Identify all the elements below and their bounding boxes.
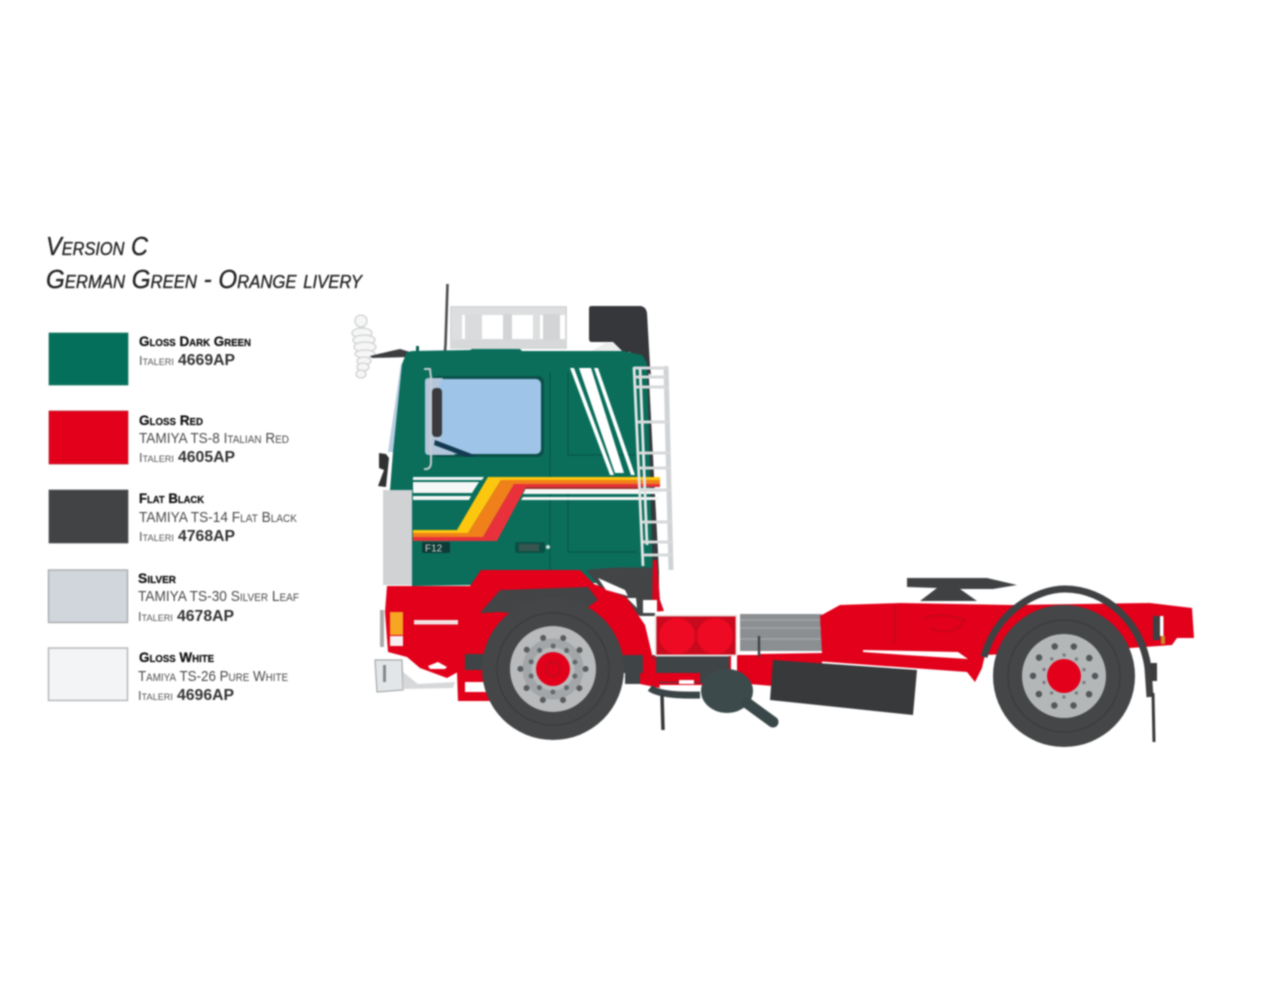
michelin man mascot <box>352 315 376 378</box>
legend item: flat black: Italeri <box>139 530 174 544</box>
F12 badge: F12 <box>425 544 443 554</box>
rear chassis rail <box>760 603 1194 682</box>
cab roof stubs <box>416 346 419 354</box>
window frame <box>425 378 455 455</box>
red chassis mid <box>737 655 822 686</box>
front wheel <box>482 598 624 740</box>
colour legend <box>48 333 299 704</box>
exhaust outlet <box>375 660 455 692</box>
side window <box>431 376 544 457</box>
ladder rungs <box>634 368 673 555</box>
antenna <box>445 284 448 351</box>
windscreen edge <box>388 364 405 452</box>
green cab body <box>390 349 653 586</box>
legend item: gloss white: Italeri <box>138 689 173 703</box>
legend item: gloss dark green: Italeri <box>139 354 174 368</box>
legend item: gloss white: Tamiya TS-26 Pure White <box>138 668 288 685</box>
legend item: gloss white <box>48 648 288 704</box>
title: German Green - Orange livery <box>46 264 364 294</box>
F12 badge <box>422 542 450 554</box>
dark axle mount front <box>465 654 487 670</box>
door handle <box>515 542 550 553</box>
legend item: silver <box>48 570 299 625</box>
roof rack <box>451 307 566 348</box>
rear wheel <box>993 605 1135 747</box>
exhaust stack <box>589 306 651 375</box>
red cab lower and fender <box>385 570 660 688</box>
legend item: gloss dark green: Gloss Dark Green <box>139 333 251 349</box>
truck illustration <box>352 284 1194 747</box>
mirror <box>432 388 442 437</box>
fifth wheel <box>907 578 1017 601</box>
legend item: silver: 4678AP <box>177 608 234 625</box>
legend item: silver: Italeri <box>138 610 173 624</box>
legend item: flat black: 4768AP <box>178 528 235 545</box>
dark rear cab mount <box>586 567 655 616</box>
silver battery box <box>740 614 822 657</box>
ladder outer rail <box>666 366 671 570</box>
legend item: gloss dark green <box>49 333 251 385</box>
title: Version C <box>46 231 148 261</box>
rear fender <box>984 589 1150 697</box>
front lamp <box>380 610 403 647</box>
cab panel lines <box>550 372 637 570</box>
mud flap <box>770 660 917 715</box>
legend item: silver: TAMIYA TS-30 Silver Leaf <box>138 588 299 605</box>
rear mudflap stay <box>1150 663 1157 742</box>
legend item: gloss red: 4605AP <box>178 449 235 466</box>
bumper highlight <box>414 620 458 624</box>
ladder <box>634 366 673 570</box>
white cut-outs <box>428 578 657 669</box>
legend item: flat black <box>49 490 298 545</box>
front stay <box>662 695 663 730</box>
white horizontal stripes <box>413 477 660 500</box>
red frame around tool box <box>655 656 730 684</box>
legend item: silver: Silver <box>138 570 177 586</box>
fuel tank box <box>656 616 736 656</box>
legend item: gloss dark green: 4669AP <box>178 352 235 369</box>
spare drum <box>701 669 753 713</box>
rear lights <box>1153 616 1165 644</box>
dark cab rear strip <box>640 352 659 590</box>
tow lever <box>747 703 773 722</box>
front step bracket <box>457 672 490 701</box>
title <box>46 231 364 294</box>
legend item: gloss red: TAMIYA TS-8 Italian Red <box>139 430 289 447</box>
legend item: gloss white: 4696AP <box>177 687 234 704</box>
legend item: flat black: Flat Black <box>139 490 205 506</box>
legend item: gloss red: Italeri <box>139 451 174 465</box>
chassis shading <box>895 605 965 643</box>
legend item: gloss red: Gloss Red <box>139 412 203 428</box>
white diagonal stripes <box>570 368 635 475</box>
silver front panel <box>383 490 412 585</box>
wiper <box>434 440 477 457</box>
legend item: flat black: TAMIYA TS-14 Flat Black <box>139 509 298 526</box>
livery ribbon: orange <box>413 480 660 537</box>
dark gearbox below fender <box>622 655 643 673</box>
chassis gap <box>863 650 968 659</box>
ladder inner rails <box>634 367 647 566</box>
dark wheel arch <box>480 587 598 620</box>
front mirror bracket <box>378 453 389 487</box>
livery ribbon: yellow <box>413 477 660 533</box>
suspension bar <box>650 688 700 695</box>
legend item: gloss red <box>49 411 289 466</box>
dark underside <box>625 655 730 684</box>
mirror arm <box>370 349 410 358</box>
grab handle <box>424 369 431 469</box>
legend item: gloss white: Gloss White <box>139 649 214 665</box>
livery ribbon: red <box>413 484 660 541</box>
